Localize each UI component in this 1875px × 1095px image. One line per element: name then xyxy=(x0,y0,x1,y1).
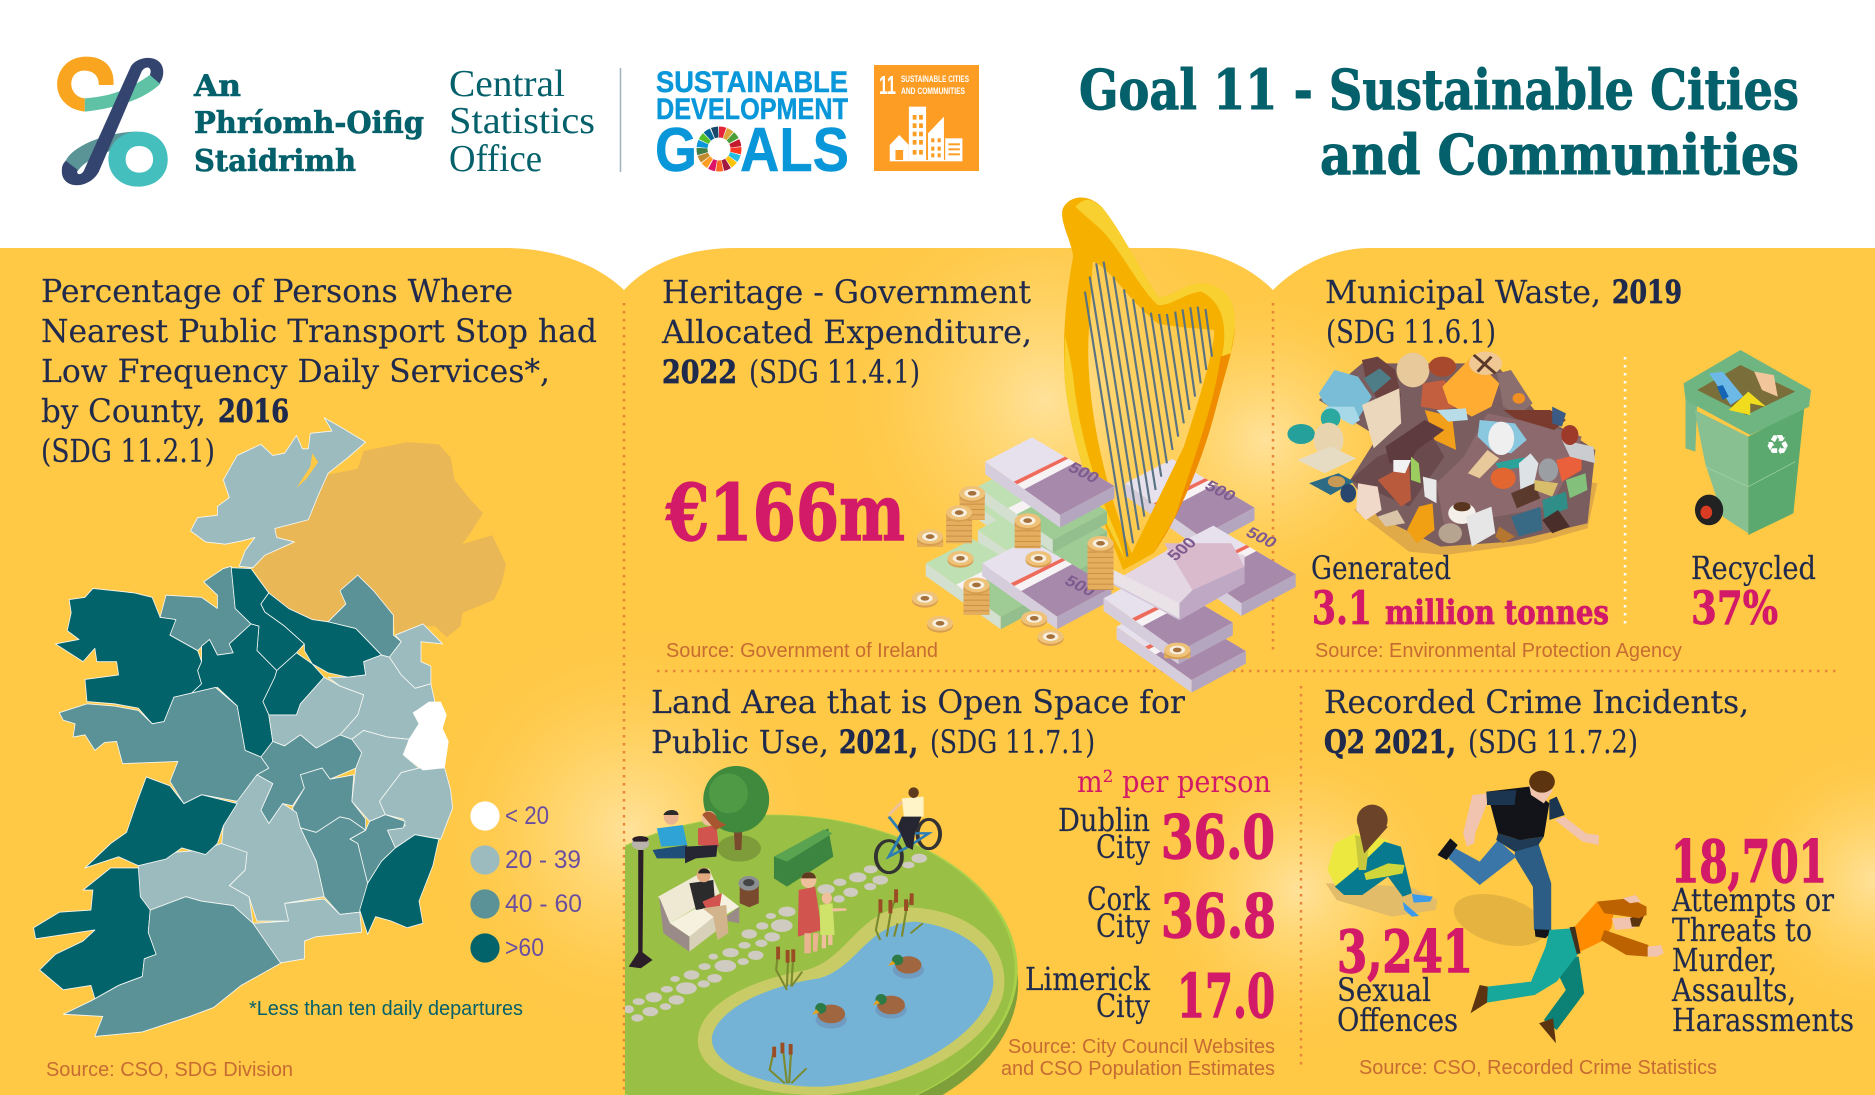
sitting woman xyxy=(1326,805,1438,917)
back money stacks xyxy=(1125,459,1296,616)
legend: 20 - 39 xyxy=(505,846,581,874)
heading: heritage xyxy=(661,273,1032,391)
panel: municipal waste xyxy=(1287,273,1816,662)
heading: open space: Public Use, xyxy=(651,723,829,761)
source: Source: CSO, Recorded Crime Statistics xyxy=(1359,1057,1717,1079)
generated tonnes: Generated xyxy=(1311,549,1451,587)
heading: waste: Municipal Waste, xyxy=(1325,273,1601,311)
stat: Dublin: City xyxy=(1096,828,1150,866)
generated tonnes xyxy=(1311,549,1609,635)
SDG logo xyxy=(655,66,849,185)
icon: SDG colour wheel xyxy=(695,125,743,173)
legend: 40 - 60 xyxy=(505,890,582,918)
Irish name: An xyxy=(193,69,241,104)
heading: waste: 2019 xyxy=(1612,273,1682,311)
heading: open space: (SDG 11.7.1) xyxy=(930,723,1095,761)
stat: sexual offences: Offences xyxy=(1337,1001,1458,1039)
source: Source: CSO, SDG Division xyxy=(46,1059,293,1081)
stat: Limerick: 17.0 xyxy=(1177,962,1275,1032)
gold coins xyxy=(912,486,1190,659)
reeds xyxy=(770,889,923,1083)
running man xyxy=(1438,771,1599,938)
SDG logo: ALS xyxy=(740,116,849,185)
heading: crime: Recorded Crime Incidents, xyxy=(1324,683,1749,721)
recycled percent: 37% xyxy=(1691,581,1778,635)
heading: crime: Q2 2021, xyxy=(1324,723,1456,761)
green and purple bricks xyxy=(926,437,1114,629)
header logo: CSO xyxy=(57,57,595,187)
SDG logo: SUSTAINABLE xyxy=(656,66,848,99)
heading: transport: (SDG 11.2.1) xyxy=(41,432,215,470)
SDG logo: DEVELOPMENT xyxy=(656,93,848,126)
heading: transport: by County, xyxy=(41,392,206,430)
illustration: pile of waste xyxy=(1287,352,1597,555)
source xyxy=(1001,1036,1275,1080)
stat: Limerick: City xyxy=(1096,987,1150,1025)
recycled percent xyxy=(1691,549,1816,635)
stat: attempts or threats: Attempts or xyxy=(1671,881,1835,919)
stat: Limerick xyxy=(1025,960,1275,1032)
English name: Central xyxy=(449,63,565,105)
heading: heritage: 2022 xyxy=(662,353,737,391)
English name xyxy=(449,63,595,180)
heading: waste xyxy=(1325,273,1682,351)
stat: Dublin: 36.0 xyxy=(1161,803,1275,873)
unit label: m² per person xyxy=(1077,765,1271,800)
front banknote stacks: 500 xyxy=(1163,534,1201,564)
back money stacks: 500 xyxy=(1242,523,1281,551)
generated tonnes: 3.1 xyxy=(1312,581,1372,635)
illustration: green recycling bin: ♻ xyxy=(1765,430,1790,462)
legend: < 20 xyxy=(505,802,549,830)
stat: sexual offences xyxy=(1337,918,1473,1039)
stat: Cork: City xyxy=(1096,907,1150,945)
source: Source: Government of Ireland xyxy=(666,640,938,662)
illustration: green recycling bin xyxy=(1684,350,1811,535)
recycled percent: Recycled xyxy=(1691,549,1816,587)
harp strings xyxy=(1085,262,1212,557)
heading: heritage: Heritage - Government xyxy=(662,273,1031,311)
footnote: *Less than ten daily departures xyxy=(249,998,523,1020)
front banknote stacks xyxy=(1104,534,1246,693)
legend xyxy=(470,801,582,963)
stat: Limerick: Limerick xyxy=(1025,960,1151,998)
stat: Dublin xyxy=(1058,801,1275,873)
illustration: money and harp xyxy=(912,197,1296,693)
main title: and Communities xyxy=(1320,122,1799,187)
Irish name xyxy=(193,69,424,179)
SDG 11 badge: SUSTAINABLE CITIES xyxy=(901,74,969,84)
English name: Office xyxy=(449,138,542,180)
illustration: park with pond xyxy=(625,766,1018,1095)
Irish name: Staidrimh xyxy=(194,144,356,179)
panel: public transport map xyxy=(34,272,597,1081)
SDG 11 badge: AND COMMUNITIES xyxy=(901,86,965,96)
heading: waste: (SDG 11.6.1) xyxy=(1326,313,1496,351)
icon: golden harp xyxy=(1062,197,1235,570)
panel: heritage expenditure xyxy=(661,197,1296,693)
dotted dividers xyxy=(624,303,1838,1095)
hedge xyxy=(774,828,833,887)
shadow under runner xyxy=(1447,884,1553,956)
lamp post xyxy=(629,836,653,968)
heading: heritage: (SDG 11.4.1) xyxy=(749,353,920,391)
source: Source: Environmental Protection Agency xyxy=(1315,640,1682,662)
stat: attempts or threats xyxy=(1671,828,1854,1039)
heading: crime xyxy=(1324,683,1749,761)
heading: transport: Nearest Public Transport Stop had xyxy=(41,312,597,350)
value: 166 million euro: €166m xyxy=(665,468,905,559)
choropleth map of Ireland by county xyxy=(34,418,506,1036)
Irish name: Phríomh-Oifig xyxy=(194,106,424,141)
stat: Cork xyxy=(1087,880,1276,952)
stepping stones xyxy=(623,854,927,1022)
legend: >60 xyxy=(505,934,544,962)
back money stacks: 500 xyxy=(1201,477,1240,505)
heading: open space: 2021, xyxy=(839,723,918,761)
yellow scalloped background panel xyxy=(0,248,1875,1095)
stat: sexual offences: 3,241 xyxy=(1337,918,1473,986)
SDG 11 badge xyxy=(874,65,979,171)
heading: open space: Land Area that is Open Space for xyxy=(651,683,1186,721)
stat: Cork: Cork xyxy=(1087,880,1150,918)
background glows xyxy=(482,248,1875,1010)
heading: transport: Percentage of Persons Where xyxy=(41,272,513,310)
stat: attempts or threats: Murder, xyxy=(1672,941,1777,979)
SDG 11 badge: 11 xyxy=(879,70,896,100)
pond xyxy=(698,907,1004,1095)
source: Source: City Council Websites xyxy=(1008,1036,1275,1058)
heading: transport: Low Frequency Daily Services*, xyxy=(41,352,550,390)
heading: crime: (SDG 11.7.2) xyxy=(1468,723,1638,761)
heading: transport xyxy=(41,272,597,470)
panel: crime incidents xyxy=(1324,683,1854,1079)
SDG logo: G xyxy=(655,116,697,185)
man on bench xyxy=(658,868,739,952)
ducks xyxy=(812,955,924,1029)
stat: attempts or threats: Threats to xyxy=(1672,911,1812,949)
English name: Statistics xyxy=(449,100,595,142)
stat: Cork: 36.8 xyxy=(1161,882,1276,952)
seated couple xyxy=(653,810,726,863)
bin xyxy=(738,876,759,907)
fallen man xyxy=(1471,895,1664,1043)
stat: sexual offences: Sexual xyxy=(1337,971,1431,1009)
heading: open space xyxy=(651,683,1186,761)
stat: attempts or threats: Assaults, xyxy=(1671,971,1796,1009)
green and purple bricks: 500 xyxy=(1064,458,1104,486)
icon: buildings xyxy=(890,107,962,161)
tree xyxy=(703,766,769,862)
heading: heritage: Allocated Expenditure, xyxy=(661,313,1032,351)
illustration: people xyxy=(1326,771,1664,1043)
heading: transport: 2016 xyxy=(218,392,289,430)
cyclist on bike xyxy=(876,787,940,873)
green and purple bricks: 500 xyxy=(1061,572,1100,600)
panel: open space xyxy=(625,688,1274,1095)
source: and CSO Population Estimates xyxy=(1001,1058,1275,1080)
stat: Dublin: Dublin xyxy=(1058,801,1150,839)
generated tonnes: million tonnes xyxy=(1385,593,1609,633)
icon: CSO knot symbol xyxy=(57,57,168,187)
mother and child xyxy=(798,872,846,953)
main title xyxy=(1079,57,1799,187)
